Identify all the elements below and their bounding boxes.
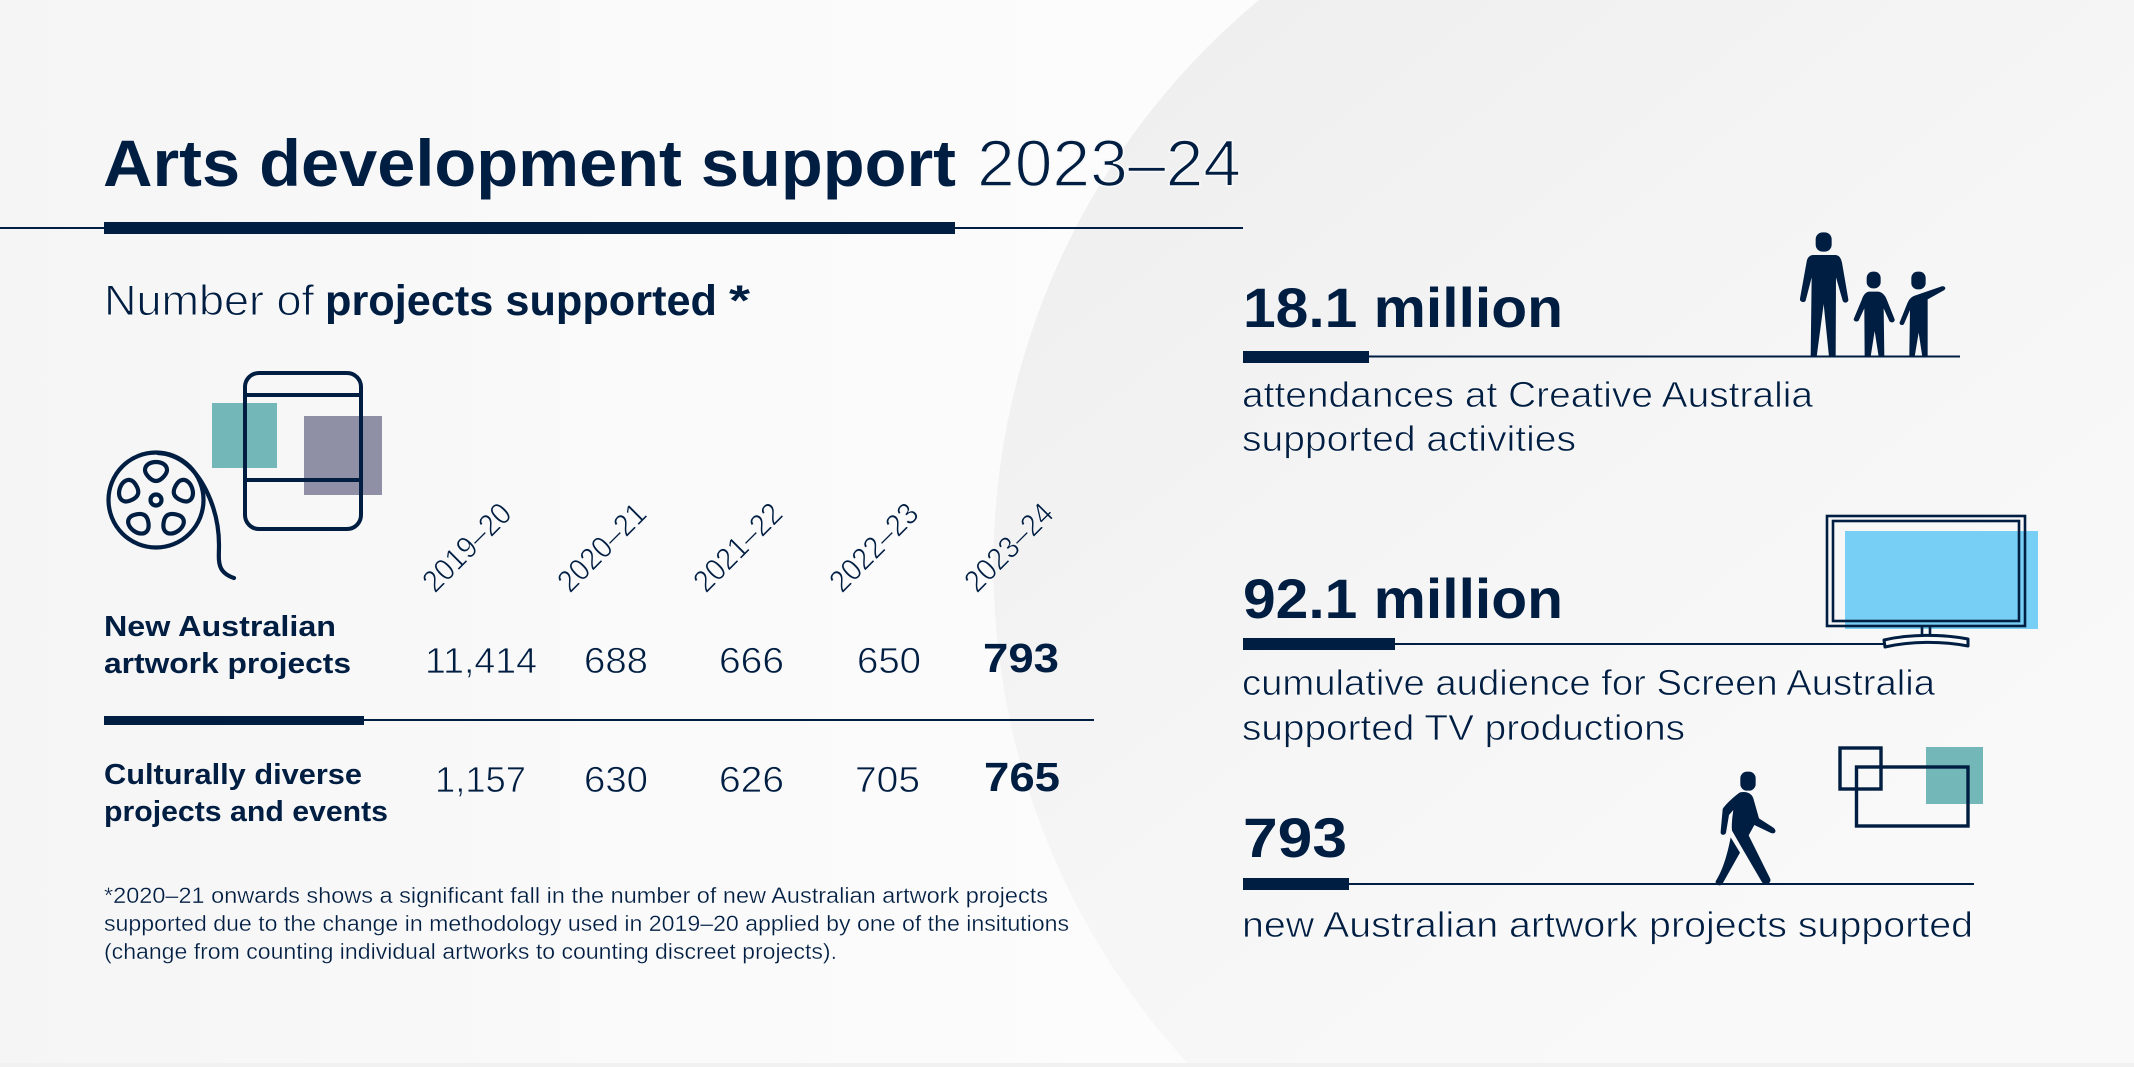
row values: Culturally diverse projects and events: 1,157: [435, 759, 526, 800]
panel: projects supported table: [104, 277, 1094, 964]
row label: New Australian artwork projects: artwork projects: [104, 648, 351, 680]
footnote: [104, 883, 1069, 964]
stat value: 92.1 million: 92.1 million: [1243, 567, 1563, 630]
row values: New Australian artwork projects: 11,414: [425, 640, 537, 681]
icon: walking person: [1716, 772, 1775, 885]
title rule: [0, 222, 1243, 234]
panel: attendances stat: [1242, 232, 1960, 459]
row label: New Australian artwork projects: New Australian: [104, 611, 336, 643]
stat description: attendances: supported activities: [1242, 418, 1576, 459]
stat rule: [1243, 638, 1884, 650]
year column headers: 2019–20: [415, 496, 518, 599]
stat value: 793: 793: [1243, 806, 1347, 869]
row values: New Australian artwork projects: [425, 635, 1059, 681]
subheading: *: [729, 277, 750, 325]
stat description: attendances: attendances at Creative Australia: [1242, 374, 1814, 415]
year column headers: 2022–23: [822, 496, 925, 599]
subheading: Number of: [104, 277, 315, 325]
footnote: (change from counting individual artworks to counting discreet projects).: [104, 939, 837, 964]
subheading: [104, 277, 750, 325]
stat description: audience: cumulative audience for Screen Australia: [1242, 662, 1936, 703]
row values: Culturally diverse projects and events: [435, 754, 1060, 800]
row values: Culturally diverse projects and events: 626: [719, 759, 784, 800]
icon: film reel and tablet: [108, 373, 382, 578]
icon: overlapping squares: [1840, 747, 1983, 826]
title: Arts development support: [103, 126, 956, 200]
year column headers: [415, 496, 1060, 599]
icon: television: [1827, 516, 2038, 647]
footnote: supported due to the change in methodology used in 2019–20 applied by one of the insitutions: [104, 911, 1069, 936]
row label: Culturally diverse projects and events: [104, 759, 388, 828]
row values: Culturally diverse projects and events: 705: [855, 759, 920, 800]
year column headers: 2020–21: [550, 496, 653, 599]
row label: Culturally diverse projects and events: projects and events: [104, 796, 388, 828]
row values: New Australian artwork projects: 650: [857, 640, 921, 681]
table rule: [104, 716, 1094, 725]
icon: adult and two children: [1800, 232, 1945, 357]
year column headers: 2023–24: [957, 496, 1060, 599]
title: 2023–24: [977, 126, 1241, 200]
stat rule: [1243, 878, 1974, 890]
stat description: new projects: new Australian artwork projects supported: [1242, 904, 1973, 945]
row values: Culturally diverse projects and events: 765: [984, 754, 1060, 800]
stat value: 18.1 million: 18.1 million: [1243, 276, 1563, 339]
stat rule: [1243, 351, 1960, 363]
panel: audience stat: [1242, 516, 2038, 748]
row values: New Australian artwork projects: 688: [584, 640, 648, 681]
panel: new artwork projects stat: [1242, 747, 1983, 945]
row values: New Australian artwork projects: 666: [719, 640, 784, 681]
row values: Culturally diverse projects and events: 630: [584, 759, 648, 800]
row label: New Australian artwork projects: [104, 611, 351, 680]
background bottom strip: [0, 1063, 2134, 1067]
subheading: projects supported: [325, 277, 717, 325]
year column headers: 2021–22: [686, 496, 789, 599]
stat description: audience: supported TV productions: [1242, 707, 1685, 748]
row label: Culturally diverse projects and events: Culturally diverse: [104, 759, 362, 791]
stat description: attendances: [1242, 374, 1814, 459]
background circle: [993, 0, 2134, 1067]
row values: New Australian artwork projects: 793: [983, 635, 1059, 681]
footnote: *2020–21 onwards shows a significant fall in the number of new Australian artwork projects: [104, 883, 1048, 908]
stat description: audience: [1242, 662, 1936, 748]
